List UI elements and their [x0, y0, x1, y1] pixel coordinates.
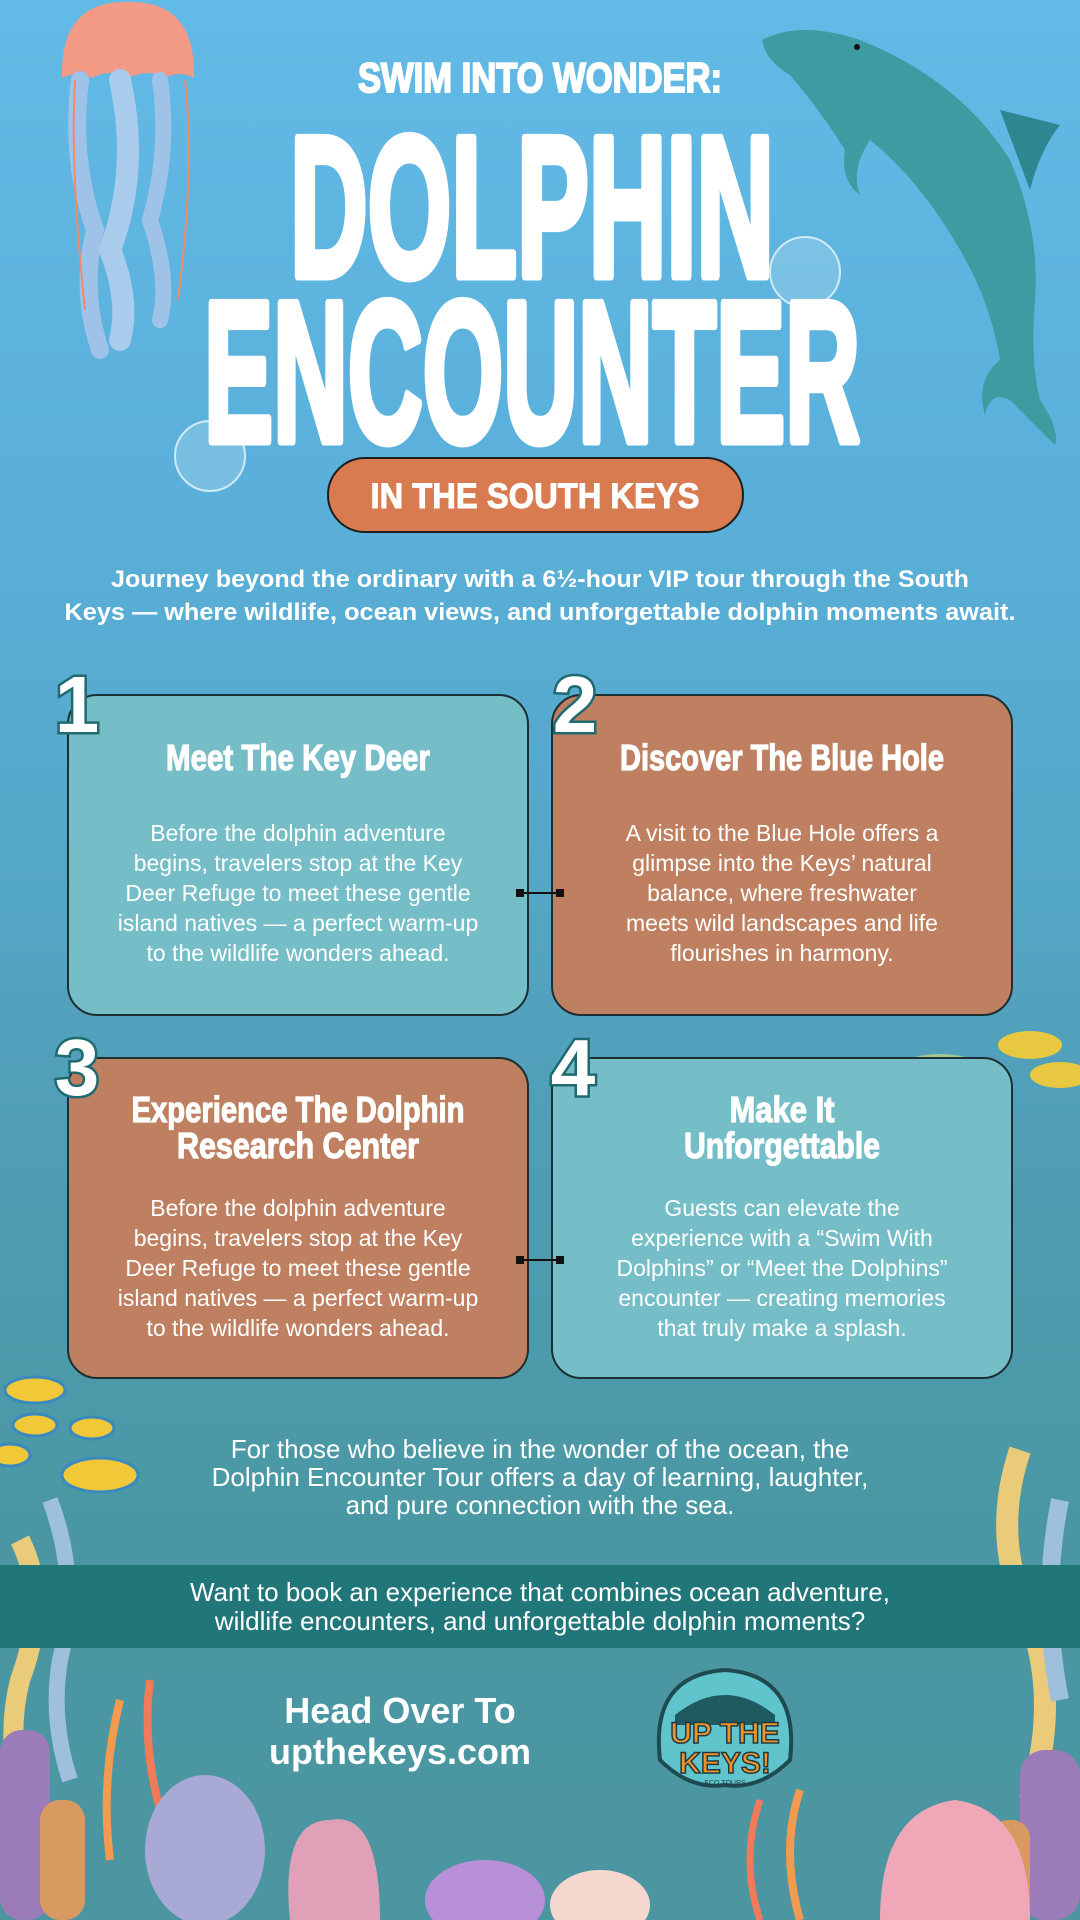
text: step 3 body: Deer Refuge to meet these gentle [125, 1255, 471, 1281]
icon: dolphin [762, 30, 1060, 445]
logo: up the keys [656, 1668, 794, 1788]
heading: discover the blue hole: Discover The Blue Hole [620, 737, 944, 778]
heading: make it unforgettable: Unforgettable [684, 1125, 880, 1166]
text: step 2 body: flourishes in harmony. [670, 940, 894, 966]
heading: experience the dolphin research center: Research Center [177, 1125, 419, 1166]
heading: make it unforgettable: Make It [730, 1089, 835, 1130]
text: step 1 body: to the wildlife wonders ahead. [146, 940, 450, 966]
text: step 1 body: Before the dolphin adventure [150, 820, 446, 846]
logo: up the keys: KEYS! [679, 1747, 771, 1780]
title: dolphin encounter [204, 125, 860, 455]
panel: step 3 [67, 1057, 529, 1379]
band: booking question: Want to book an experience that combines ocean adventure, [190, 1577, 890, 1607]
closing text: Dolphin Encounter Tour offers a day of learning, laughter, [212, 1462, 868, 1492]
text: step 1 body: island natives — a perfect warm-up [118, 910, 478, 936]
closing text: and pure connection with the sea. [346, 1490, 734, 1520]
text: step 1 body: Deer Refuge to meet these gentle [125, 880, 471, 906]
text: step 4 body [616, 1195, 948, 1341]
panel: step 2 [551, 694, 1013, 1016]
band: booking question: wildlife encounters, and unforgettable dolphin moments? [215, 1606, 865, 1636]
heading: experience the dolphin research center [132, 1089, 464, 1166]
call to action: upthekeys.com [269, 1731, 531, 1772]
text: step 2 body [626, 820, 938, 966]
text: step 4 body: Guests can elevate the [664, 1195, 900, 1221]
text: step 1 body: begins, travelers stop at the Key [134, 850, 462, 876]
text: step 2 body: glimpse into the Keys’ natural [632, 850, 932, 876]
icon: fish school right [895, 1031, 1080, 1107]
connector: row 2 [516, 1256, 564, 1264]
intro text: Keys — where wildlife, ocean views, and unforgettable dolphin moments await. [64, 599, 1016, 626]
text: step 4 body: Dolphins” or “Meet the Dolphins” [616, 1255, 948, 1281]
call to action [269, 1690, 531, 1772]
text: step 2 body: A visit to the Blue Hole offers a [626, 820, 938, 846]
text: step 3 body: to the wildlife wonders ahead. [146, 1315, 450, 1341]
intro text: Journey beyond the ordinary with a 6½-hour VIP tour through the South [111, 566, 969, 593]
pill: in the south keys [327, 457, 744, 533]
text: step 1 body [118, 820, 478, 966]
text: step 2 body: balance, where freshwater [647, 880, 917, 906]
panel: step 1 [67, 694, 529, 1016]
text: step 3 body: Before the dolphin adventure [150, 1195, 446, 1221]
pill: in the south keys: IN THE SOUTH KEYS [370, 477, 700, 516]
heading: meet the key deer: Meet The Key Deer [166, 737, 430, 778]
text: step 3 body: begins, travelers stop at the Key [134, 1225, 462, 1251]
icon: fish school left [0, 1377, 138, 1492]
band: booking question [0, 1565, 1080, 1648]
call to action: Head Over To [284, 1690, 516, 1731]
text: step 4 body: experience with a “Swim With [631, 1225, 933, 1251]
text: step 3 body [118, 1195, 478, 1341]
logo: up the keys: UP THE [670, 1717, 780, 1750]
intro text [64, 566, 1016, 626]
icon: bubbles [175, 237, 840, 491]
closing text: For those who believe in the wonder of the ocean, the [231, 1434, 849, 1464]
connector: row 1 [516, 889, 564, 897]
text: step 3 body: island natives — a perfect warm-up [118, 1285, 478, 1311]
closing text [212, 1434, 868, 1520]
icon: seaweed and coral [0, 1450, 1080, 1920]
logo: up the keys: ECO TOURS [704, 1780, 746, 1787]
text: step 4 body: encounter — creating memories [618, 1285, 946, 1311]
panel: step 4 [551, 1057, 1013, 1379]
heading: make it unforgettable [684, 1089, 880, 1166]
text: step 4 body: that truly make a splash. [657, 1315, 907, 1341]
icon: jellyfish [62, 2, 194, 350]
text: step 2 body: meets wild landscapes and life [626, 910, 938, 936]
